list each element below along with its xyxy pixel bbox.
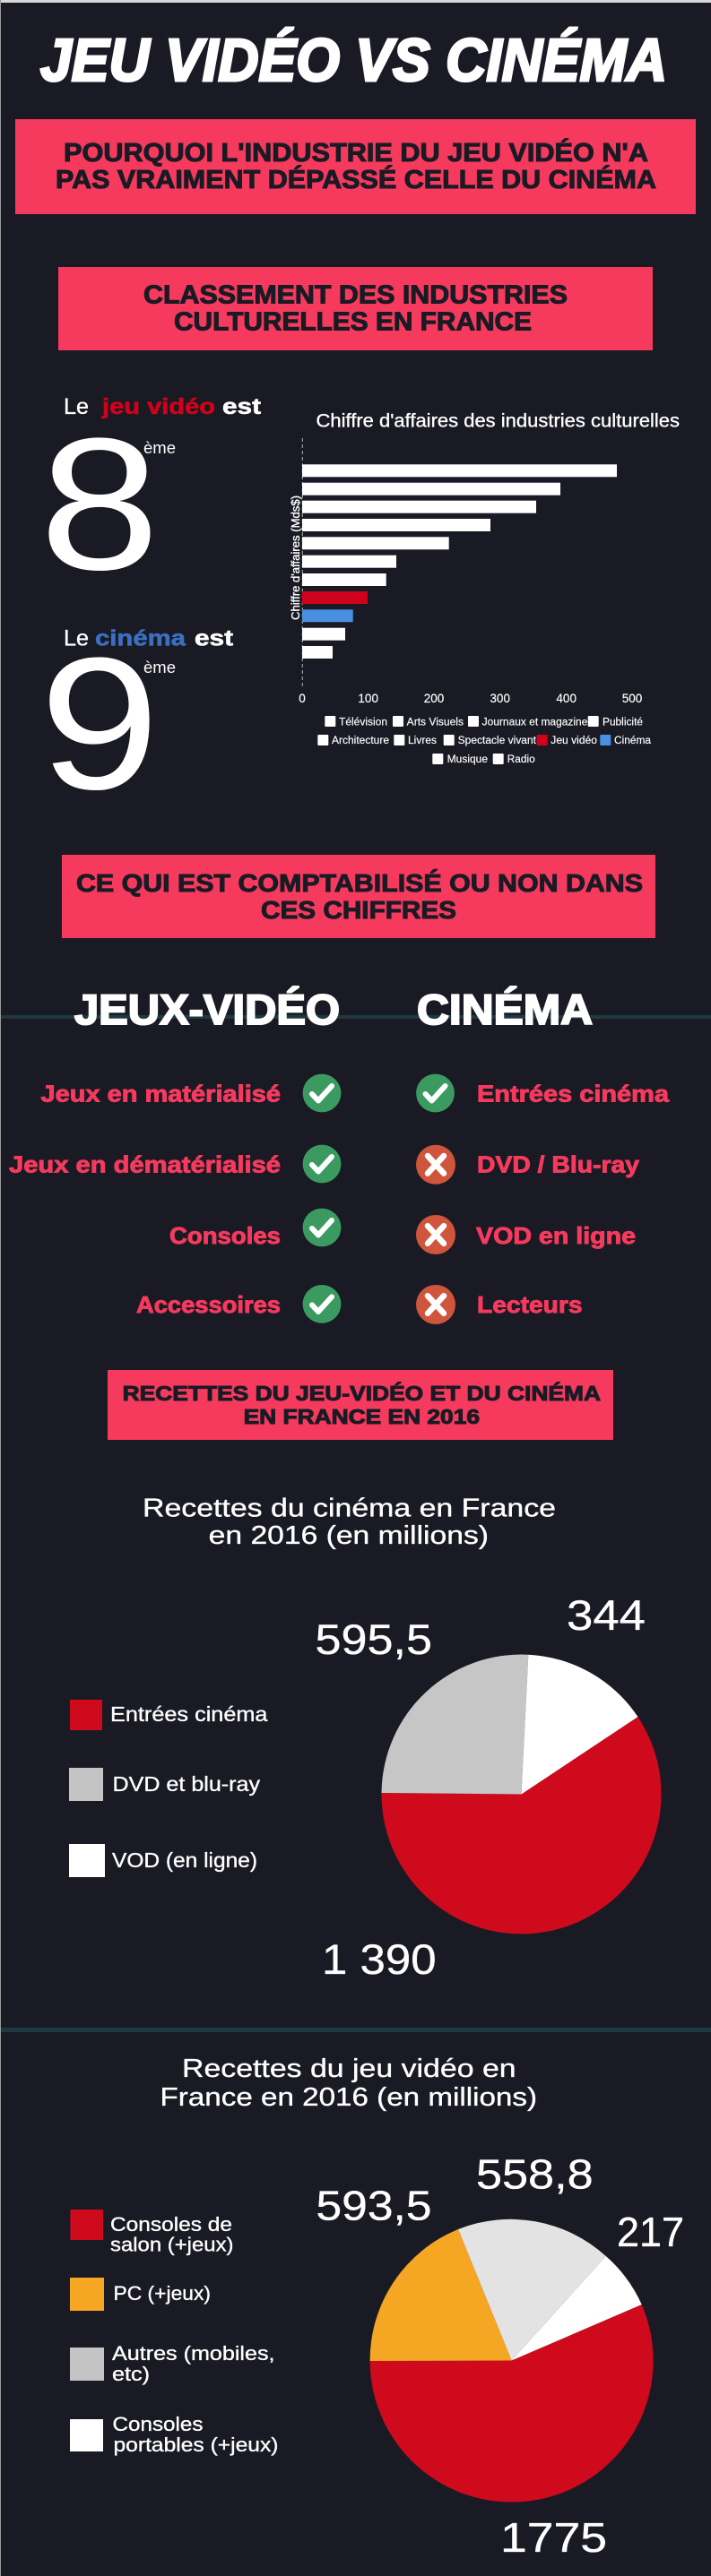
legend: jeu vidéo: portables (+jeux) [113,2434,278,2456]
legend: cinéma: VOD (en ligne) [112,1848,257,1872]
rank: cinéma: cinéma [95,626,186,651]
pie values: jeu vidéo: 558,8 [476,2150,594,2197]
chart title: recettes cinéma: en 2016 (en millions) [209,1521,489,1550]
chart title: recettes jeu vidéo: Recettes du jeu vidéo en [182,2055,516,2083]
chart legend: Livres [408,736,437,746]
rank: jeu vidéo: jeu vidéo [101,394,215,419]
banner: comptabilisé: CE QUI EST COMPTABILISÉ OU NON DANS [76,869,643,897]
rank: jeu vidéo [39,394,262,609]
list: jeux-vidéo: Jeux en dématérialisé [9,1151,281,1178]
rank: cinéma [39,618,234,829]
x axis labels: 0 [299,692,306,705]
list: cinéma [416,1074,670,1324]
legend: jeu vidéo: etc) [112,2363,150,2385]
legend: jeu vidéo: Autres (mobiles, [112,2342,274,2365]
pie chart: cinéma [381,1655,661,1934]
legend: cinéma: DVD et blu-ray [113,1772,261,1796]
pie values: cinéma: 1 390 [322,1935,437,1983]
pie values: jeu vidéo: 593,5 [316,2183,432,2229]
legend: jeu vidéo: PC (+jeux) [113,2282,211,2305]
legend: cinéma: Entrées cinéma [110,1702,268,1726]
chart title: recettes cinéma: Recettes du cinéma en France [143,1495,556,1523]
chart title: recettes jeu vidéo: France en 2016 (en millions) [160,2083,537,2112]
legend: jeu vidéo: salon (+jeux) [110,2234,233,2256]
list: cinéma: Entrées cinéma [477,1081,670,1107]
list: cinéma: DVD / Blu-ray [477,1151,640,1178]
x axis labels: 300 [490,692,510,705]
chart legend: Télévision [339,717,387,728]
rank: jeu vidéo: 8 [39,399,160,609]
banner: recettes: EN FRANCE EN 2016 [244,1405,480,1428]
x axis labels: 500 [622,692,642,705]
heading: cinéma: CINÉMA [417,986,593,1033]
chart legend: Spectacle vivant [458,736,537,746]
chart title: recettes cinéma [143,1495,556,1550]
chart legend: Musique [447,754,488,765]
rank: jeu vidéo: Le [64,394,89,419]
legend: jeu vidéo: Consoles [113,2413,203,2435]
chart title: recettes jeu vidéo [160,2055,537,2112]
rank: jeu vidéo: est [222,394,262,419]
banner: pourquoi [15,119,696,214]
chart legend: Publicité [603,717,643,728]
banner: classement: CULTURELLES EN FRANCE [174,307,532,336]
banner: pourquoi: PAS VRAIMENT DÉPASSÉ CELLE DU CINÉMA [56,164,656,194]
list: cinéma: Lecteurs [477,1291,583,1318]
x axis labels [299,692,642,705]
bar chart [289,411,680,765]
chart legend [317,716,652,765]
chart legend: Cinéma [614,736,652,746]
chart legend: Arts Visuels [407,717,464,728]
legend: jeu vidéo: Consoles de [110,2213,232,2236]
title: JEU VIDÉO VS CINÉMA [40,27,667,94]
legend: jeu vidéo [70,2210,278,2456]
banner: recettes [108,1370,613,1440]
list: jeux-vidéo: Accessoires [136,1291,281,1318]
legend: cinéma [69,1700,268,1877]
pie values: jeu vidéo: 217 [617,2209,684,2255]
x axis labels: 100 [358,692,378,705]
list: jeux-vidéo: Jeux en matérialisé [41,1081,281,1107]
pie chart: jeu vidéo [370,2219,654,2503]
pie values: cinéma [316,1591,646,1983]
chart title: Chiffre d'affaires des industries culturelles [316,411,680,432]
rank: cinéma: Le [64,626,89,651]
banner: recettes: RECETTES DU JEU-VIDÉO ET DU CINÉMA [123,1381,601,1405]
chart legend: Jeu vidéo [551,736,597,746]
list: cinéma: VOD en ligne [476,1222,636,1249]
banner: pourquoi: POURQUOI L'INDUSTRIE DU JEU VIDÉO N'A [64,137,648,168]
rank: cinéma: est [195,626,234,651]
pie values: jeu vidéo: 1775 [500,2514,607,2561]
rank: cinéma: ème [143,658,176,676]
pie values: cinéma: 595,5 [316,1615,432,1663]
chart legend: Radio [507,754,535,765]
heading: jeux-vidéo: JEUX-VIDÉO [74,986,340,1033]
chart legend: Journaux et magazine [482,717,587,728]
banner: comptabilisé [62,855,655,938]
chart legend: Architecture [332,736,389,746]
banner: classement: CLASSEMENT DES INDUSTRIES [143,281,568,310]
x axis labels: 400 [556,692,577,705]
banner: comptabilisé: CES CHIFFRES [261,896,456,924]
list: jeux-vidéo [9,1074,341,1323]
pie values: jeu vidéo [316,2150,684,2561]
y axis label: Chiffre d'affaires (Mds$) [289,495,302,620]
banner: classement [58,267,653,350]
rank: jeu vidéo: ème [143,438,176,457]
bars [302,464,617,659]
x axis labels: 200 [424,692,444,705]
list: jeux-vidéo: Consoles [169,1222,281,1249]
rank: cinéma: 9 [39,618,160,829]
pie values: cinéma: 344 [567,1591,646,1639]
